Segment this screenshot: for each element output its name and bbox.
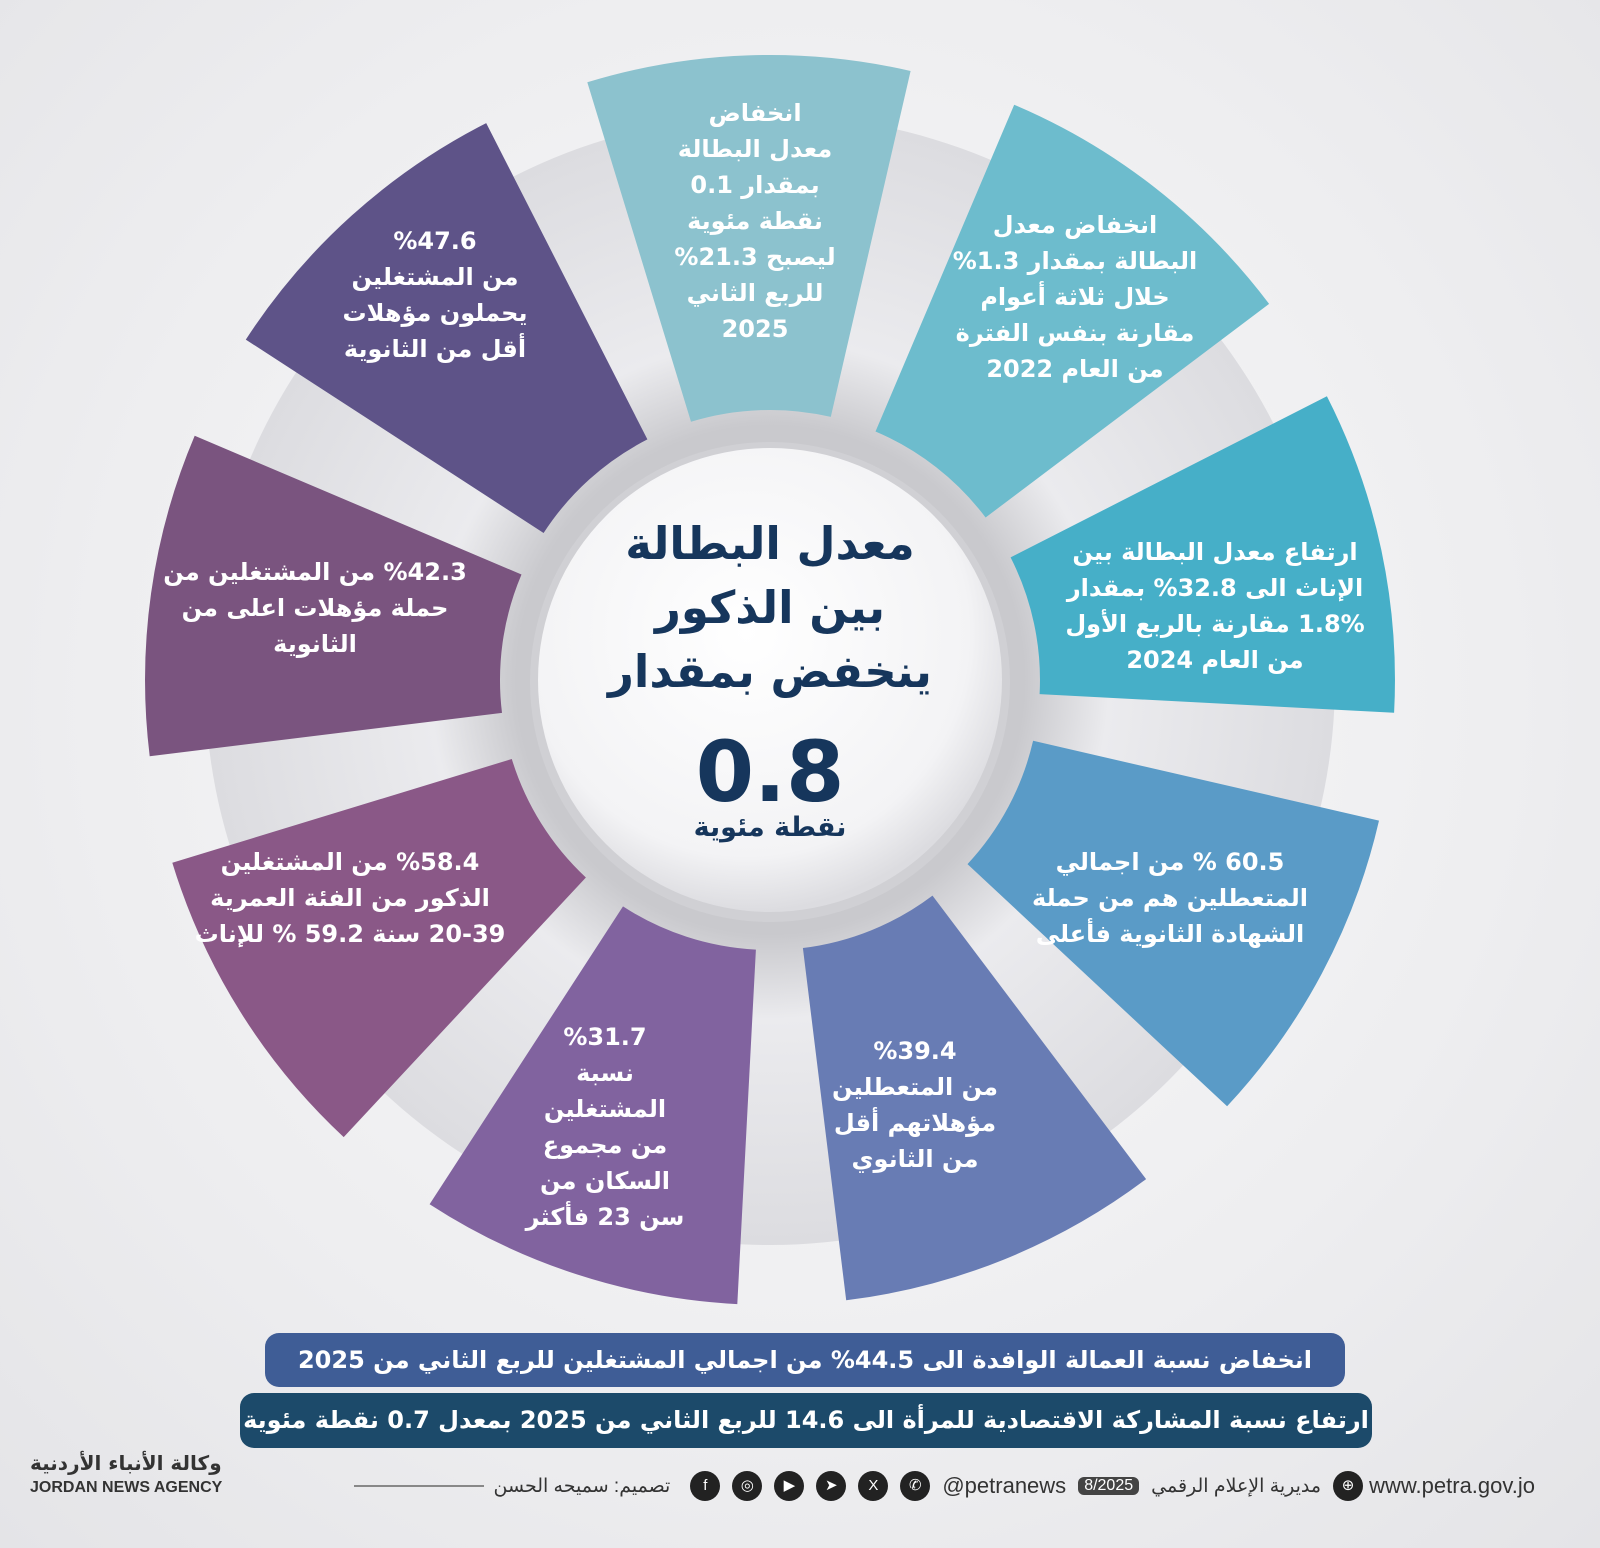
segment bottom right	[803, 896, 1146, 1300]
footer info: ➤	[825, 1477, 838, 1494]
footer info: ⊕	[1342, 1477, 1354, 1494]
text: right: من العام 2024	[1126, 646, 1304, 674]
text: bottom left: المشتغلين	[544, 1095, 666, 1123]
footer info: ▶	[784, 1477, 795, 1494]
footer info: ◎	[741, 1477, 754, 1494]
segment right	[1011, 396, 1395, 713]
text: right	[1065, 538, 1365, 674]
text: top: 2025	[722, 315, 788, 343]
text: left	[163, 558, 467, 658]
text: bottom left: السكان من	[540, 1167, 670, 1195]
text: upper left: أقل من الثانوية	[344, 335, 526, 363]
footer info: www.petra.gov.jo	[1369, 1473, 1535, 1498]
text: bottom left	[524, 1023, 684, 1231]
text: lower right: المتعطلين هم من حملة	[1032, 884, 1308, 912]
text: top: انخفاض	[708, 99, 802, 127]
center title: ينخفض بمقدار	[608, 645, 932, 698]
logo: agency: JORDAN NEWS AGENCY	[30, 1479, 222, 1496]
text: bottom right	[832, 1037, 998, 1173]
center title: معدل البطالة	[625, 517, 915, 570]
text: upper right	[953, 211, 1197, 383]
text: top: بمقدار 0.1	[690, 171, 820, 199]
center unit: نقطة مئوية	[694, 812, 846, 843]
segment upper left	[246, 123, 647, 533]
text: lower left	[195, 848, 505, 948]
text: upper left: يحملون مؤهلات	[343, 299, 527, 327]
text: bottom right: مؤهلاتهم أقل	[834, 1109, 996, 1137]
text: lower right	[1032, 848, 1308, 948]
text: right: ارتفاع معدل البطالة بين	[1072, 538, 1358, 566]
banner 1: انخفاض نسبة العمالة الوافدة الى 44.5% من اجمالي المشتغلين للربع الثاني من 2025	[298, 1346, 1312, 1374]
center value: 0.8	[696, 723, 844, 821]
segment upper right	[876, 105, 1269, 517]
logo: agency	[30, 1450, 222, 1496]
footer info: @petranews	[942, 1473, 1066, 1498]
text: upper left: من المشتغلين	[351, 263, 519, 291]
text: right: 1.8% مقارنة بالربع الأول	[1065, 610, 1365, 638]
banner 2	[240, 1393, 1372, 1448]
text: lower right: 60.5 % من اجمالي	[1056, 848, 1284, 876]
segment left	[145, 436, 522, 756]
text: left: الثانوية	[273, 630, 357, 658]
text: bottom right: من المتعطلين	[832, 1073, 998, 1101]
segment lower left	[172, 759, 586, 1137]
text: bottom left: %31.7	[563, 1023, 647, 1051]
text: lower right: الشهادة الثانوية فأعلى	[1036, 920, 1304, 948]
text: bottom left: من مجموع	[543, 1131, 667, 1159]
text: upper right: خلال ثلاثة أعوام	[980, 283, 1170, 311]
footer info: X	[868, 1477, 878, 1494]
text: bottom right: من الثانوي	[852, 1145, 978, 1173]
text: upper right: من العام 2022	[986, 355, 1164, 383]
segment bottom left	[430, 906, 756, 1304]
text: left: حملة مؤهلات اعلى من	[182, 594, 448, 622]
text: bottom right: %39.4	[873, 1037, 957, 1065]
footer info: تصميم: سميحه الحسن	[494, 1476, 670, 1496]
text: lower left: %58.4 من المشتغلين	[221, 848, 479, 876]
footer info: f	[703, 1477, 707, 1494]
banner 2: ارتفاع نسبة المشاركة الاقتصادية للمرأة الى 14.6 للربع الثاني من 2025 بمعدل 0.7 نقطة مئوية	[243, 1406, 1369, 1434]
text: bottom left: نسبة	[576, 1059, 634, 1087]
text: upper right: البطالة بمقدار 1.3%	[953, 247, 1197, 275]
text: upper right: انخفاض معدل	[993, 211, 1157, 239]
text: left: %42.3 من المشتغلين من	[163, 558, 467, 586]
footer info	[354, 1471, 1535, 1501]
segment lower right	[968, 741, 1379, 1106]
center title	[606, 517, 932, 698]
footer info: مديرية الإعلام الرقمي	[1151, 1476, 1321, 1496]
text: lower left: الذكور من الفئة العمرية	[210, 884, 490, 912]
center title: بين الذكور	[655, 581, 885, 634]
text: top: ليصبح 21.3%	[674, 243, 836, 271]
text: top: نقطة مئوية	[687, 207, 823, 235]
segment top	[587, 55, 911, 422]
text: right: الإناث الى 32.8% بمقدار	[1067, 574, 1363, 602]
text: top: معدل البطالة	[678, 135, 832, 163]
text: upper right: مقارنة بنفس الفترة	[956, 319, 1194, 347]
footer info: 8/2025	[1084, 1477, 1133, 1494]
text: upper left: %47.6	[393, 227, 477, 255]
banner 1	[265, 1333, 1345, 1387]
logo: agency: وكالة الأنباء الأردنية	[30, 1451, 222, 1475]
text: upper left	[343, 227, 527, 363]
footer info: ✆	[909, 1477, 922, 1494]
text: lower left: 20-39 سنة 59.2 % للإناث	[195, 920, 505, 948]
text: top: للربع الثاني	[687, 279, 823, 307]
text: bottom left: سن 23 فأكثر	[526, 1203, 684, 1231]
text: top	[674, 99, 836, 343]
